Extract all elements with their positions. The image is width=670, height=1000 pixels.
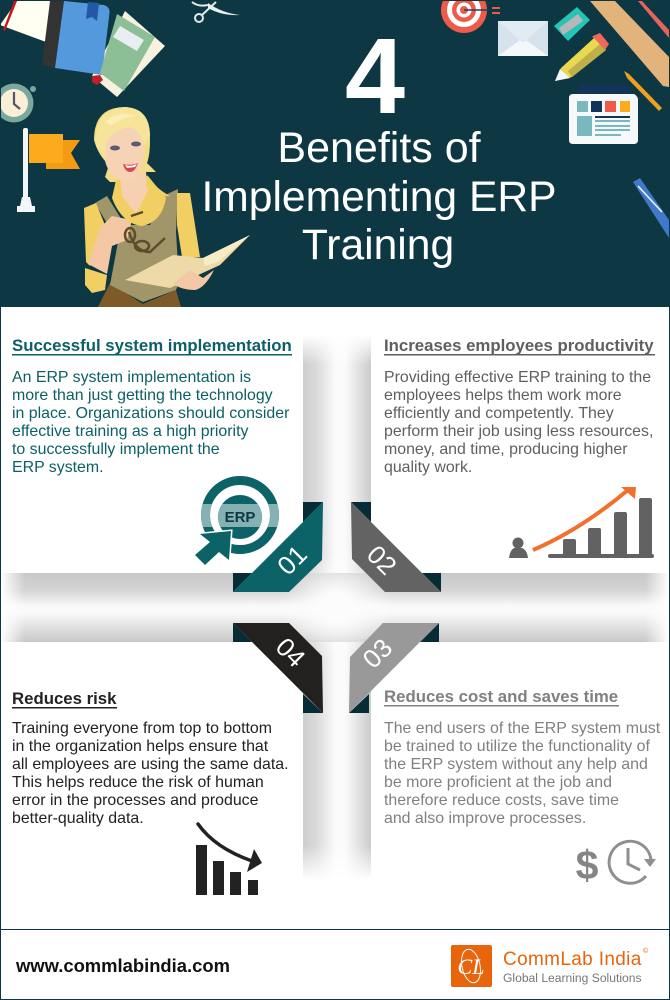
logo: CommLab India: Global Learning Solutions — [503, 971, 642, 985]
footer divider — [0, 929, 670, 930]
title: Training — [302, 221, 454, 269]
illustration: books — [0, 1, 165, 97]
panel 2: increases employees productivity — [384, 336, 655, 476]
panel 3: reduces cost and saves time — [384, 687, 661, 827]
panel 2: increases employees productivity: quality work. — [384, 459, 472, 476]
illustration: woman with book — [84, 107, 250, 307]
panel 4: reduces risk: Training everyone from top to bottom — [12, 720, 272, 737]
illustration: layout card — [569, 84, 638, 144]
panel 1: successful system implementation: effective training as a high priority — [12, 423, 248, 440]
illustration: ruler — [590, 1, 669, 87]
vertical shadow band — [303, 335, 371, 880]
logo: CommLab India: CL — [458, 954, 484, 979]
illustration: sharpener — [554, 7, 590, 41]
ribbon 03: 03 — [357, 633, 398, 674]
panel 3: reduces cost and saves time: Reduces cost and saves time — [384, 687, 618, 706]
panel 1: successful system implementation: Successful system implementation — [12, 336, 292, 355]
logo: CommLab India: CommLab India — [503, 949, 642, 970]
illustration: small pencil — [624, 71, 662, 111]
panel 2: increases employees productivity: employees helps them work more — [384, 387, 622, 404]
panel 1: successful system implementation: in place. Organizations should consider — [12, 405, 290, 422]
panel 4: reduces risk: This helps reduce the risk of human — [12, 774, 264, 791]
icon: cost and time — [576, 841, 656, 888]
ribbon 04 — [233, 623, 323, 713]
icon: declining chart — [196, 824, 262, 895]
panel 4: reduces risk: in the organization helps ensure that — [12, 738, 269, 755]
illustration: blue pen — [633, 178, 669, 238]
panel 2: increases employees productivity: efficiently and competently. They — [384, 405, 614, 422]
illustration: target — [441, 0, 500, 33]
ribbon 03 — [349, 623, 439, 713]
logo: CommLab India: © — [643, 947, 649, 955]
title: Implementing ERP — [201, 173, 557, 221]
panel 1: successful system implementation: An ERP system implementation is — [12, 369, 251, 386]
illustration: yellow pencil — [555, 33, 609, 81]
horizontal shadow band — [1, 552, 669, 662]
logo: CommLab India — [451, 945, 649, 987]
panel 1: successful system implementation: to successfully implement the — [12, 441, 220, 458]
ribbon 04: 04 — [270, 632, 311, 673]
panel 4: reduces risk: error in the processes and produce — [12, 792, 259, 809]
panel 4: reduces risk: Reduces risk — [12, 689, 117, 708]
illustration: stopwatch — [0, 84, 36, 122]
ribbon 01 — [233, 502, 323, 592]
icon: ERP target with cursor: ERP — [225, 509, 255, 526]
illustration: flag — [17, 128, 80, 212]
ribbon 02 — [351, 502, 441, 592]
panel 2: increases employees productivity: money, and time, producing higher — [384, 441, 628, 458]
panel 1: successful system implementation: more than just getting the technology — [12, 387, 273, 404]
panel 4: reduces risk: better-quality data. — [12, 810, 144, 827]
title: 4 — [345, 15, 405, 136]
panel 3: reduces cost and saves time: the ERP system without any help and — [384, 756, 648, 773]
panel 1: successful system implementation — [12, 336, 292, 476]
panel 3: reduces cost and saves time: be more proficient at the job and — [384, 774, 612, 791]
panel 2: increases employees productivity: perform their job using less resources, — [384, 423, 653, 440]
panel 2: increases employees productivity: Providing effective ERP training to the — [384, 369, 651, 386]
panel 3: reduces cost and saves time: therefore reduce costs, save time — [384, 792, 619, 809]
ribbon 02: 02 — [361, 539, 403, 581]
panel 3: reduces cost and saves time: be trained to utilize the functionality of — [384, 738, 650, 755]
panel 4: reduces risk — [12, 689, 288, 827]
icon: cost and time: $ — [576, 842, 599, 888]
panel 3: reduces cost and saves time: The end users of the ERP system must — [384, 720, 661, 737]
illustration: scissors — [192, 2, 240, 22]
panel 4: reduces risk: all employees are using the same data. — [12, 756, 288, 773]
ribbon 01: 01 — [271, 539, 313, 581]
icon: ERP target with cursor — [195, 480, 274, 565]
panel 2: increases employees productivity: Increases employees productivity — [384, 336, 654, 355]
illustration: envelope — [498, 21, 548, 56]
illustration: red pencil — [638, 1, 669, 38]
website url: www.commlabindia.com — [15, 955, 230, 976]
panel 3: reduces cost and saves time: and also improve processes. — [384, 810, 586, 827]
header background — [0, 0, 670, 307]
panel 1: successful system implementation: ERP system. — [12, 459, 104, 476]
title: Benefits of — [277, 124, 482, 172]
icon: growth chart — [509, 487, 654, 558]
title — [201, 15, 557, 269]
